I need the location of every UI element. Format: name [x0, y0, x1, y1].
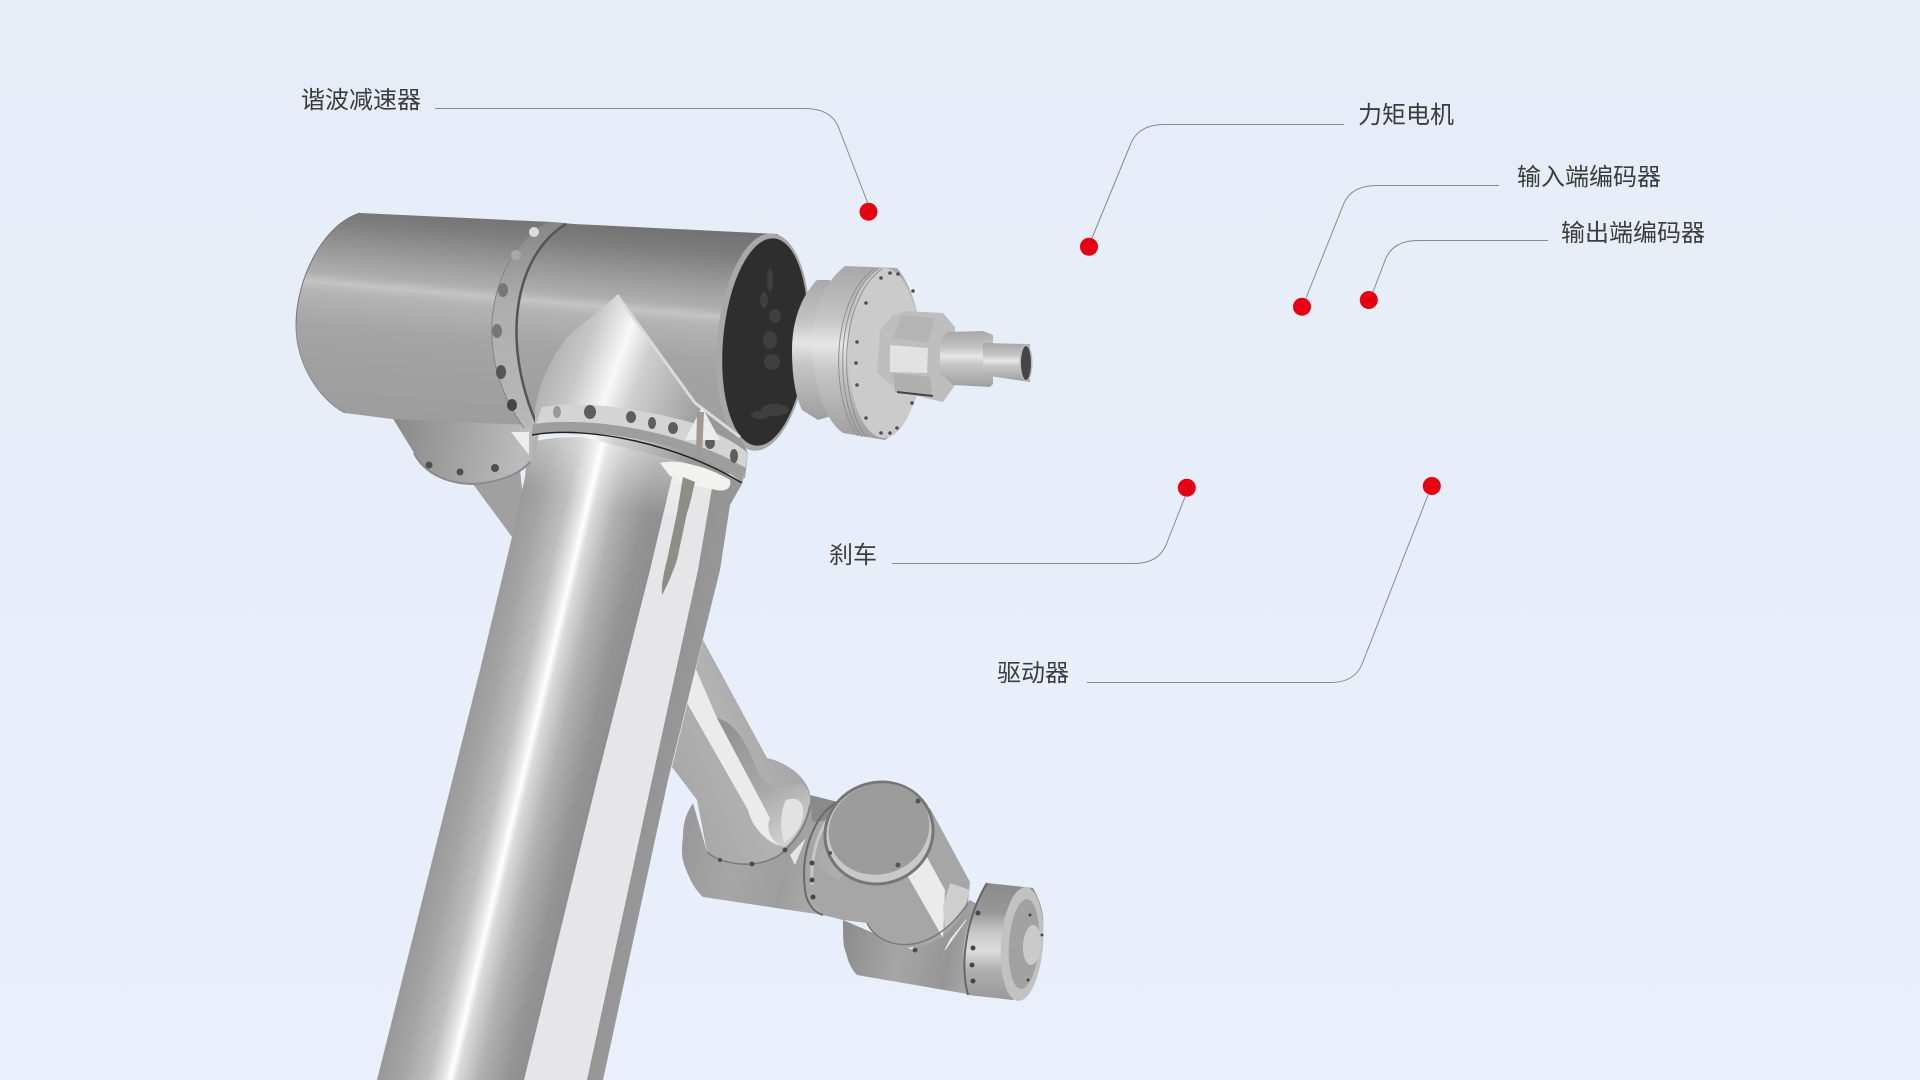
opening of housing: [708, 229, 818, 455]
joint ring: [492, 222, 566, 428]
marker: [1178, 479, 1196, 497]
leader line: [1092, 124, 1344, 238]
label: 力矩电机: [1358, 102, 1454, 129]
round end disc: [809, 765, 949, 901]
reflection blob: [660, 462, 730, 491]
wrist highlight: [907, 857, 945, 938]
lower elbow and wrist: [672, 640, 1047, 1002]
housing branch: [392, 400, 545, 484]
label: 驱动器: [997, 660, 1069, 687]
callout: 输出端编码器: [1360, 220, 1705, 309]
forearm: [672, 640, 810, 864]
upper housing cylinders: [296, 213, 800, 450]
shaft bore: [1020, 344, 1032, 382]
joint ring: [804, 802, 837, 915]
leader line: [435, 108, 868, 205]
arm slot: [662, 477, 695, 595]
forearm slot: [717, 718, 810, 847]
back cylinder: [792, 280, 835, 420]
marker: [1080, 238, 1098, 256]
wrist flange: [963, 883, 1047, 1002]
output shaft: [983, 343, 1030, 382]
label: 输出端编码器: [1561, 220, 1705, 247]
callout: 输入端编码器: [1293, 164, 1661, 316]
marker: [1423, 477, 1441, 495]
dome sheen: [515, 436, 700, 515]
front flange: [812, 266, 922, 440]
wrist arm: [805, 808, 970, 948]
marker: [1360, 291, 1378, 309]
link behind housing: [470, 470, 530, 560]
callout: 力矩电机: [1080, 102, 1454, 256]
robot arm illustration: [296, 213, 1047, 1080]
label: 刹车: [829, 542, 877, 569]
callout: 谐波减速器: [301, 87, 878, 221]
marker: [860, 203, 878, 221]
leader line: [1373, 240, 1548, 292]
hub: [877, 311, 955, 402]
leader line: [1306, 186, 1499, 298]
motor assembly: [792, 266, 1032, 440]
leader line: [1087, 495, 1428, 682]
label: 谐波减速器: [301, 87, 421, 114]
flange band with holes: [532, 404, 748, 483]
elbow lower body: [682, 797, 850, 915]
callout: 刹车: [829, 479, 1196, 569]
label: 输入端编码器: [1517, 164, 1661, 191]
callout: 驱动器: [997, 477, 1441, 687]
forearm highlight: [687, 667, 784, 846]
stepped shaft: [940, 331, 993, 387]
white reflection band: [524, 477, 713, 1080]
main arm: [377, 436, 742, 1080]
leader line: [892, 497, 1185, 564]
second elbow body: [843, 900, 1040, 1000]
marker: [1293, 298, 1311, 316]
cone joint: [532, 295, 748, 483]
